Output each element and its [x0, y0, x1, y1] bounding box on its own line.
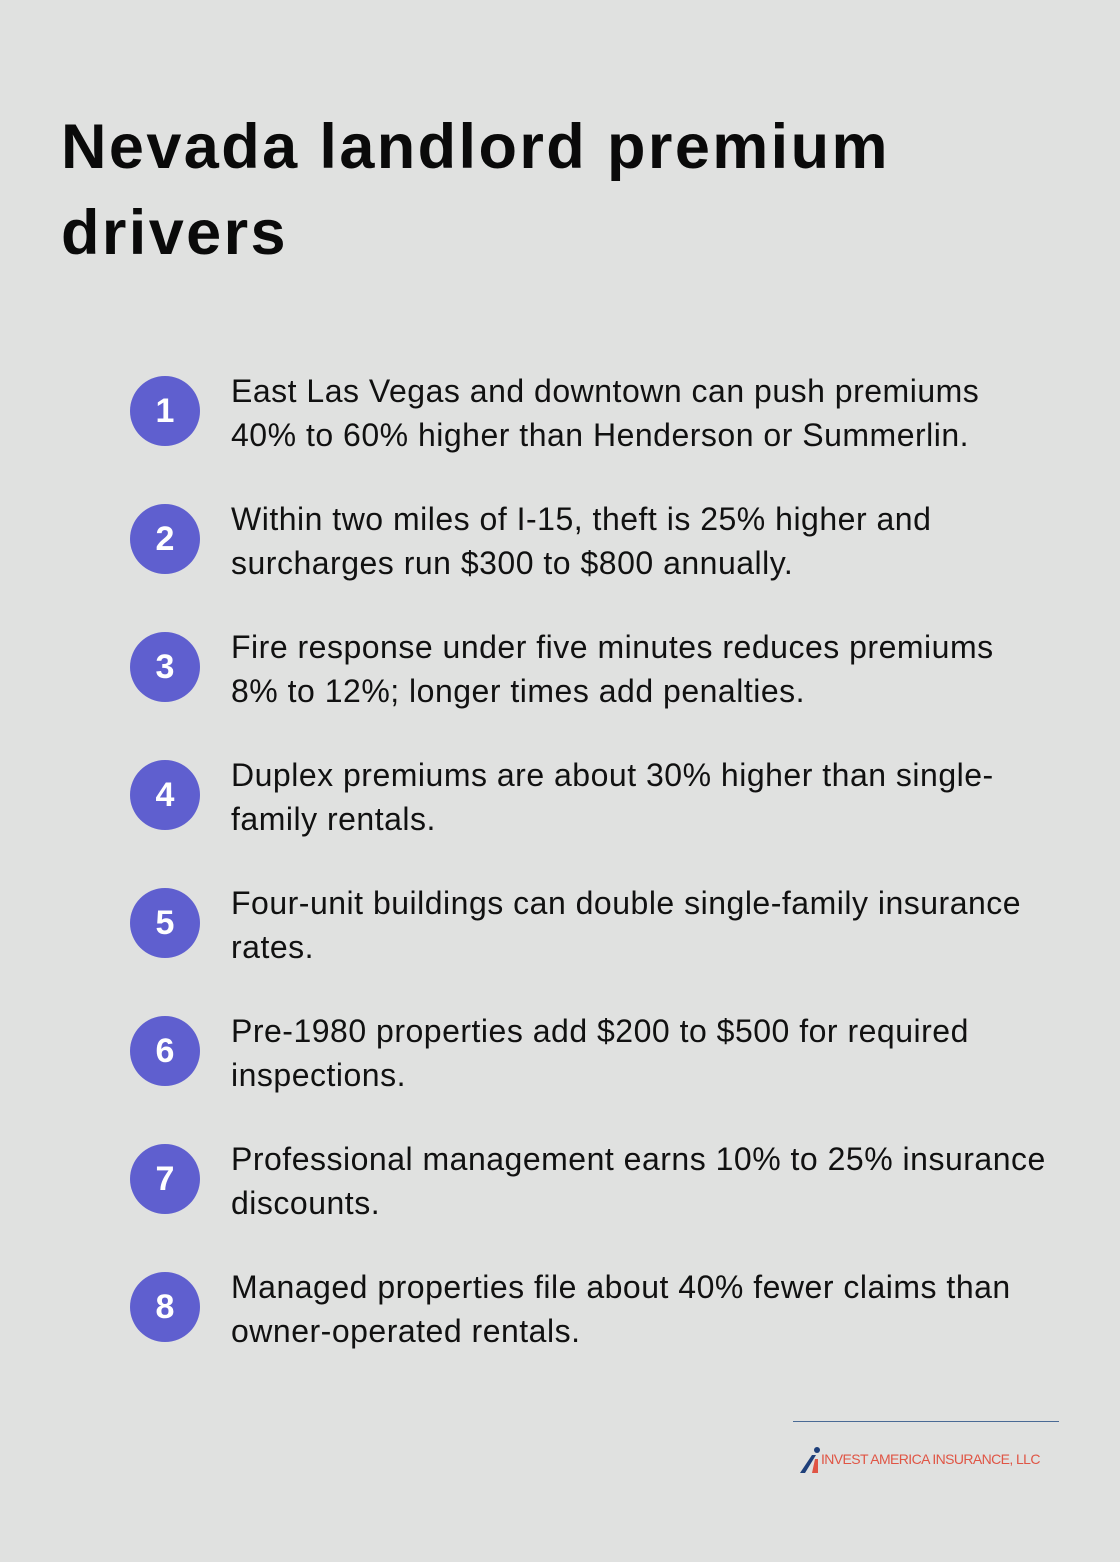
icon: logo mark: [800, 1447, 820, 1473]
item 4: 4: [156, 776, 174, 814]
item 4: family rentals.: [231, 801, 436, 837]
title: Nevada landlord premium: [61, 112, 890, 182]
item 1: East Las Vegas and downtown can push premiums: [231, 373, 979, 409]
item 4: Duplex premiums are about 30% higher than single-: [231, 757, 994, 793]
item 3: 3: [156, 648, 174, 686]
item 8: owner-operated rentals.: [231, 1313, 580, 1349]
item 5: rates.: [231, 929, 314, 965]
logo: [793, 1421, 1059, 1473]
item 3: Fire response under five minutes reduces premiums: [231, 629, 994, 665]
logo: INVEST AMERICA INSURANCE, LLC: [821, 1451, 1040, 1467]
item 7: 7: [156, 1160, 174, 1198]
item 2: surcharges run $300 to $800 annually.: [231, 545, 793, 581]
item 1: [130, 373, 979, 453]
item 2: [130, 501, 931, 581]
item 8: [130, 1269, 1011, 1349]
item 6: Pre-1980 properties add $200 to $500 for required: [231, 1013, 969, 1049]
item 7: [130, 1141, 1046, 1221]
item 3: 8% to 12%; longer times add penalties.: [231, 673, 805, 709]
item 6: [130, 1013, 969, 1093]
title: [61, 112, 890, 268]
item 6: 6: [156, 1032, 174, 1070]
item 7: discounts.: [231, 1185, 380, 1221]
item 5: Four-unit buildings can double single-family insurance: [231, 885, 1021, 921]
item 8: Managed properties file about 40% fewer claims than: [231, 1269, 1011, 1305]
title: drivers: [61, 198, 288, 268]
item 1: 40% to 60% higher than Henderson or Summerlin.: [231, 417, 969, 453]
item 7: Professional management earns 10% to 25% insurance: [231, 1141, 1046, 1177]
item 5: 5: [156, 904, 174, 942]
item 8: 8: [156, 1288, 174, 1326]
item 6: inspections.: [231, 1057, 406, 1093]
item 2: 2: [156, 520, 174, 558]
item 3: [130, 629, 994, 709]
item 1: 1: [156, 392, 174, 430]
item 4: [130, 757, 994, 837]
item 2: Within two miles of I-15, theft is 25% higher and: [231, 501, 931, 537]
item 5: [130, 885, 1021, 965]
